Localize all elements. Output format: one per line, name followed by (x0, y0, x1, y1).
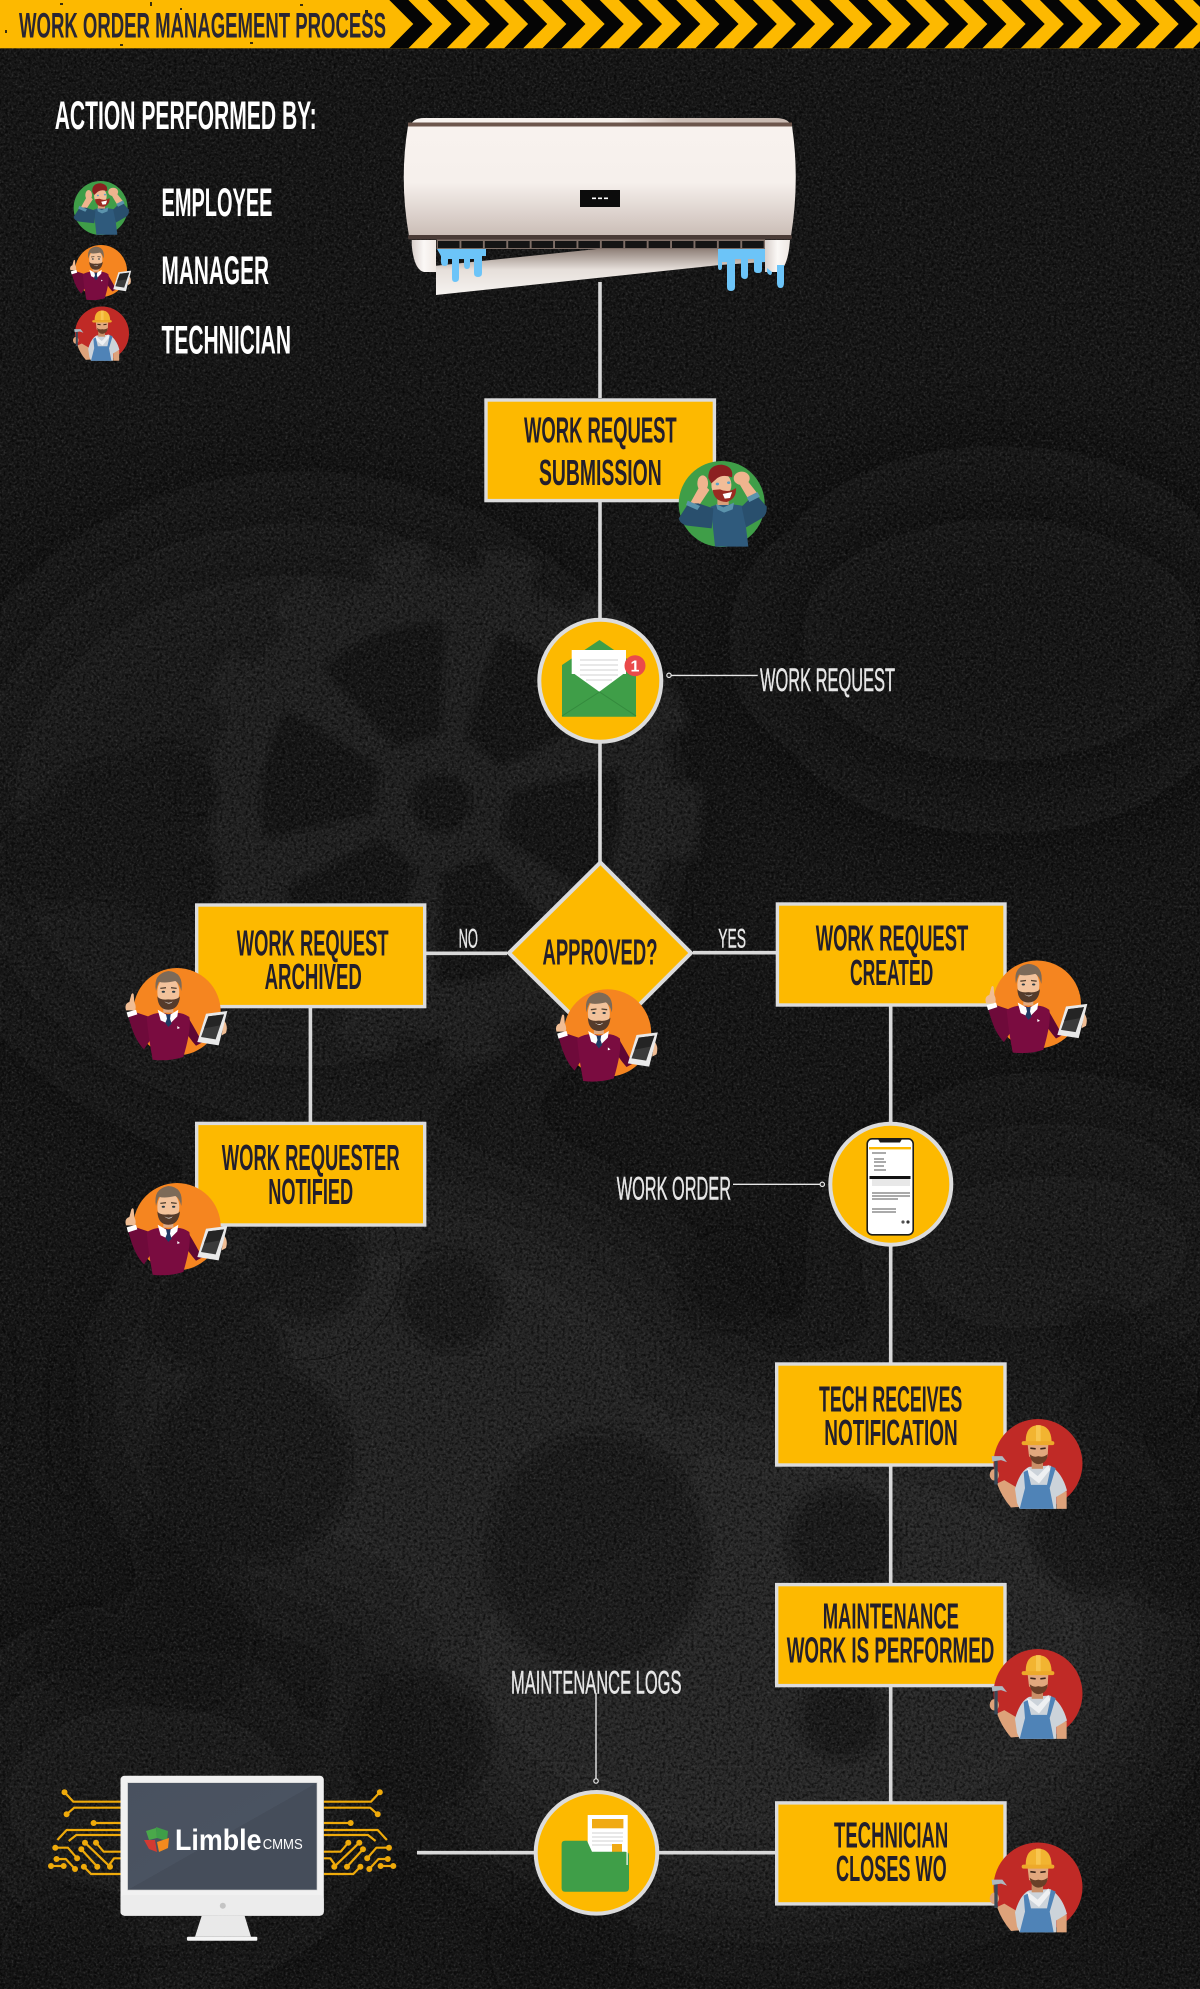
step: maintenance work is performed: WORK IS PERFORMED (787, 1629, 994, 1670)
step: work request created: WORK REQUEST (816, 918, 968, 959)
ac display (580, 190, 620, 207)
legend item: technician: TECHNICIAN (162, 318, 291, 362)
step: work request archived (197, 905, 425, 1007)
logo wordmark: Limble (175, 1824, 262, 1857)
legend heading: ACTION PERFORMED BY: (55, 94, 317, 138)
header banner: hazard stripe (0, 0, 1200, 48)
icon: circuit traces right (324, 1789, 396, 1874)
step: tech receives notification: TECH RECEIVES (819, 1378, 962, 1419)
icon: air conditioner with leaking water (404, 118, 796, 295)
icon: technician avatar notification (990, 1419, 1082, 1509)
callout: maintenance logs: MAINTENANCE LOGS (511, 1664, 682, 1700)
icon: circuit traces left (48, 1789, 120, 1874)
callout: work request: WORK REQUEST (760, 662, 895, 698)
connector lines of the flowchart (310, 282, 891, 1853)
step: maintenance work is performed (777, 1585, 1005, 1686)
decision: approved?: APPROVED? (542, 931, 658, 972)
step: work request archived: WORK REQUEST (237, 923, 389, 964)
legend: action performed by: EMPLOYEE (162, 181, 272, 225)
step: work request submission (486, 400, 714, 501)
step: work requester notified (197, 1123, 425, 1225)
icon: manager avatar archived (125, 968, 227, 1060)
step: work request created (777, 904, 1005, 1005)
legend item: manager: MANAGER (162, 249, 269, 293)
label: yes: YES (718, 924, 746, 954)
step: tech receives notification: NOTIFICATION (824, 1412, 958, 1453)
node: work order phone (830, 1124, 951, 1245)
step: work requester notified: WORK REQUESTER (222, 1137, 400, 1178)
step: maintenance work is performed: MAINTENANCE (823, 1596, 959, 1637)
step: work request submission: SUBMISSION (539, 452, 662, 493)
decision: approved? (509, 862, 691, 1044)
step: work requester notified: NOTIFIED (268, 1171, 353, 1212)
legend item: employee (74, 181, 272, 235)
callout: work order: WORK ORDER (617, 1170, 731, 1206)
step: work request created: CREATED (850, 952, 933, 993)
title: WORK ORDER MANAGEMENT PROCESS (19, 6, 386, 46)
legend: action performed by (55, 94, 317, 362)
icon: manager avatar created (985, 960, 1087, 1053)
step: technician closes wo: TECHNICIAN (834, 1814, 948, 1855)
icon: manager avatar notified (125, 1183, 227, 1275)
step: work request submission: WORK REQUEST (524, 409, 677, 450)
node: work request envelope (539, 620, 661, 742)
node: maintenance logs folder (536, 1792, 657, 1914)
step: technician closes wo: CLOSES WO (836, 1848, 947, 1889)
icon: limble cmms monitor (120, 1776, 324, 1941)
icon: technician avatar closes (990, 1842, 1082, 1932)
step: technician closes wo (777, 1803, 1005, 1904)
node: work request envelope: 1 (631, 658, 640, 676)
logo suffix: CMMS (263, 1836, 303, 1853)
legend item: technician (73, 306, 291, 362)
step: tech receives notification (777, 1364, 1005, 1465)
callout: maintenance logs (511, 1664, 682, 1783)
text: NO (459, 924, 478, 954)
icon: employee avatar (679, 461, 767, 547)
icon: technician avatar performed (990, 1649, 1082, 1739)
icon: limble logo mark (144, 1827, 169, 1852)
callout: work request (667, 662, 895, 698)
step: work request archived: ARCHIVED (265, 956, 362, 997)
icon: water drips (437, 249, 784, 291)
icon: manager avatar on decision (556, 989, 658, 1082)
legend item: manager (70, 245, 269, 300)
